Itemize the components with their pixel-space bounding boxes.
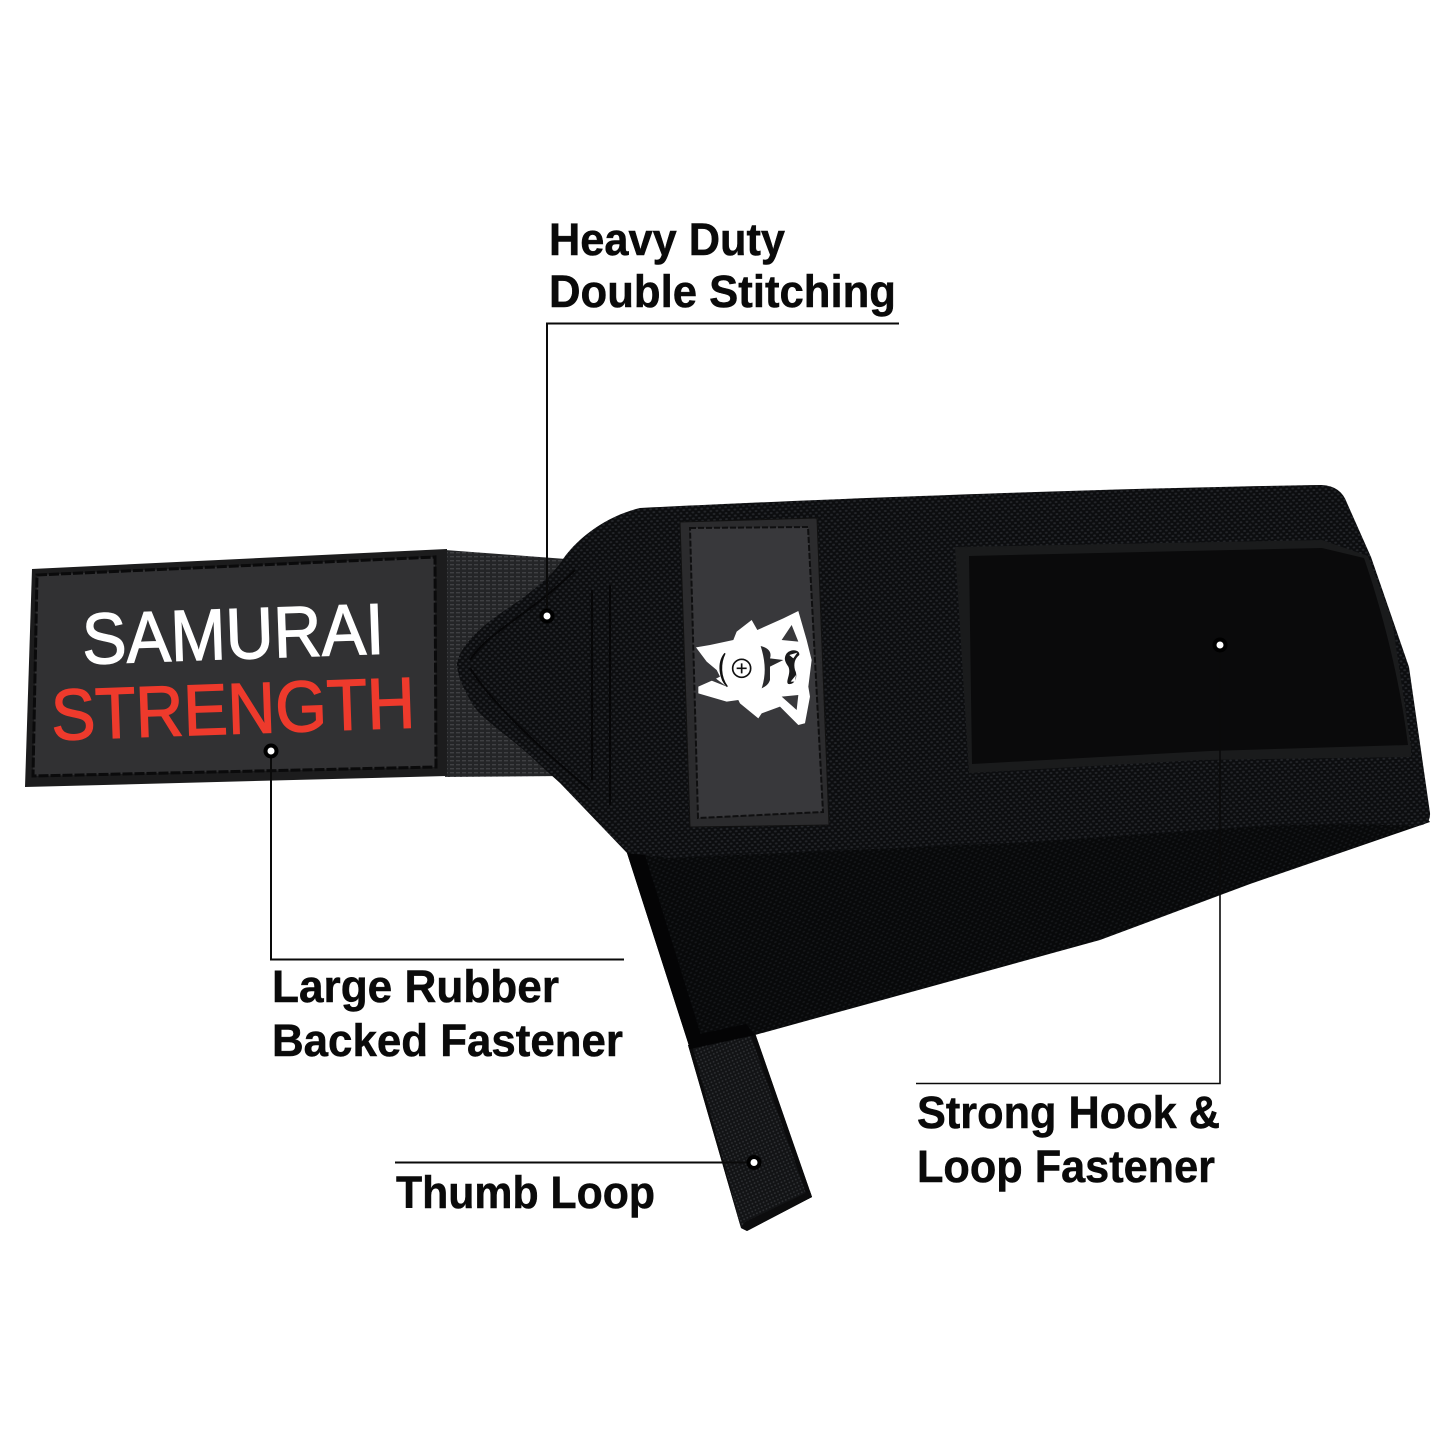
callout: large rubber backed fastener	[264, 744, 624, 1066]
samurai strength fastener tab	[25, 549, 447, 787]
elastic strip between fastener and band	[445, 550, 566, 777]
product: wrist wrap	[25, 485, 1430, 1231]
callout: strong hook and loop fastener: Loop Fastener	[917, 1141, 1215, 1192]
brand text: strength: STRENGTH	[50, 663, 416, 756]
stitching on the pointed end	[470, 570, 610, 805]
callout: large rubber backed fastener: Backed Fastener	[272, 1015, 623, 1066]
callout: thumb loop	[395, 1155, 762, 1218]
brand text: samurai: SAMURAI	[81, 589, 385, 680]
rubber logo patch	[680, 518, 829, 827]
callout: large rubber backed fastener: Large Rubber	[272, 961, 559, 1012]
thumb loop	[688, 1033, 812, 1231]
callout: heavy duty double stitching	[540, 214, 899, 624]
callout: heavy duty double stitching: Heavy Duty	[549, 214, 786, 265]
lower band: inner side of the wrap	[627, 800, 1430, 1049]
callout: strong hook and loop fastener	[916, 638, 1228, 1192]
icon: samurai helmet logo	[696, 611, 812, 725]
callout: thumb loop: Thumb Loop	[396, 1167, 655, 1218]
main band: outer side of the wrap	[457, 485, 1430, 858]
callout: strong hook and loop fastener: Strong Hook &	[917, 1087, 1220, 1138]
callout: heavy duty double stitching: Double Stitching	[549, 266, 896, 317]
hook and loop fastener panel	[955, 540, 1411, 773]
